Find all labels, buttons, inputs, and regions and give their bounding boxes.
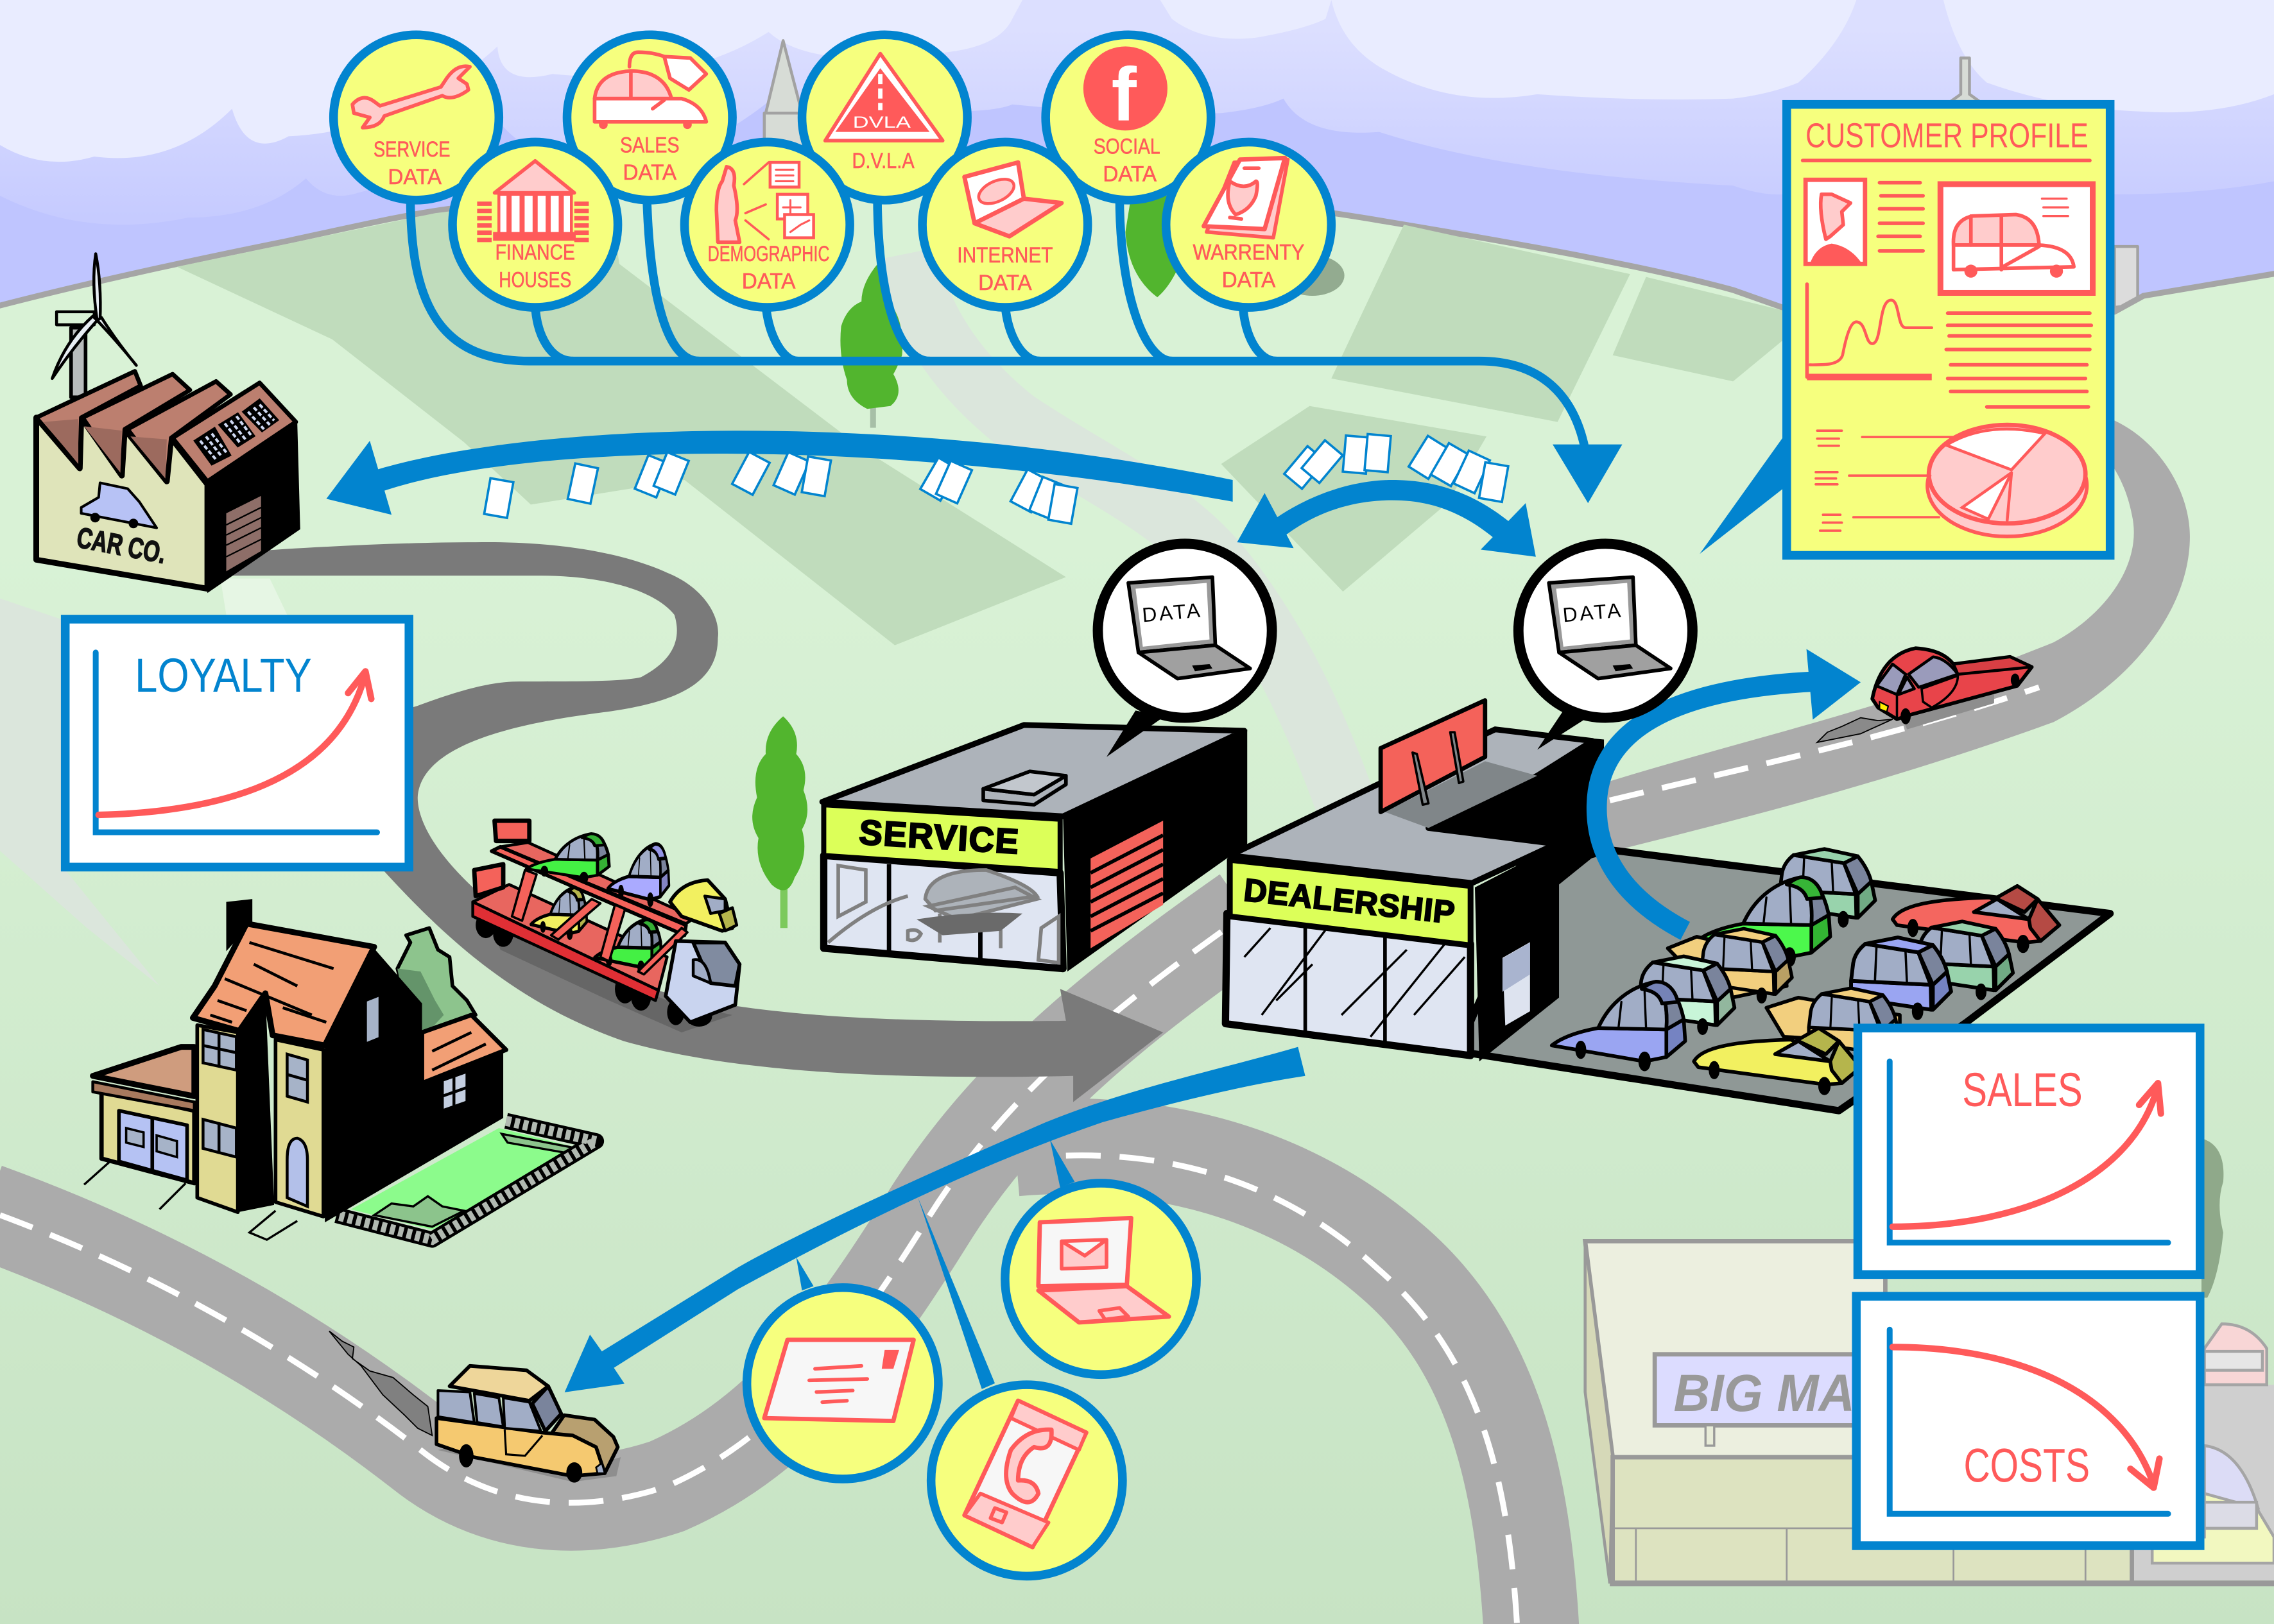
service roof box: [983, 771, 1066, 805]
icon: laptop with pie: [965, 162, 1062, 236]
icon: social f: f: [1112, 53, 1137, 137]
big market store, faded: BIG MA: [1674, 1364, 1855, 1423]
icon: person with charts: [716, 162, 814, 242]
circle: laptop email: [1005, 1183, 1196, 1374]
garden: [336, 1121, 596, 1240]
tree: beside service: [752, 716, 807, 928]
loyalty chart: [65, 619, 409, 867]
icon: social f: [1083, 46, 1167, 137]
light roads with dashed centre lines: [0, 914, 1531, 1624]
blue arrow back to factory: [326, 431, 1233, 515]
data collection lines: [410, 196, 1585, 450]
arrow head into dealership data: [1553, 445, 1623, 503]
parking lot: [1458, 850, 2110, 1111]
circle: demographic data: [685, 142, 850, 307]
road dashes: [0, 687, 2039, 1624]
sales rising curve: [1893, 1083, 2161, 1227]
costs falling curve: [1893, 1347, 2159, 1488]
circle: sales data: SALES: [620, 133, 680, 157]
icon: dvla road sign: DVLA: [853, 114, 911, 132]
distant castle: [1051, 58, 2138, 312]
laptop: service: DATA: [1141, 599, 1202, 626]
icon: dvla road sign: [825, 54, 943, 141]
big market store, faded: [1585, 1241, 2274, 1584]
cars in lot: [1552, 849, 2060, 1093]
roofs: [193, 924, 374, 1045]
circle: service data: DATA: [388, 165, 442, 189]
sales chart: [1858, 1028, 2200, 1274]
circle: post: [747, 1288, 938, 1479]
tree: behind warranty circle: [1125, 196, 1186, 297]
pale tracks: [0, 253, 1348, 986]
profile title: CUSTOMER PROFILE: [1805, 116, 2089, 155]
portrait lines: [1878, 183, 1923, 251]
portrait: [1805, 180, 1865, 264]
profile text lines: [1946, 313, 2091, 407]
blue arrow from lot to road: [1597, 649, 1861, 931]
circle: internet data: INTERNET: [957, 243, 1053, 268]
laptop: service: [1128, 577, 1250, 679]
icon: bank with coins: [485, 161, 581, 242]
circle: phone: [931, 1385, 1123, 1576]
circle: social data: [1046, 35, 1211, 200]
roof sign: [1381, 700, 1485, 812]
background: sky and clouds: [0, 0, 2274, 464]
circle: demographic data: DATA: [742, 269, 796, 294]
blue double arrow between laptops: [1237, 480, 1536, 557]
data bubble: dealership: [1519, 543, 1693, 749]
circle: finance houses: [452, 142, 618, 307]
tree: behind data line: [840, 262, 902, 428]
circle: social data: SOCIAL: [1094, 135, 1160, 159]
pie legend lines: [1816, 431, 1955, 531]
circle: service data: [334, 35, 499, 200]
icon: wrench: [352, 66, 470, 128]
circle: warranty data: DATA: [1222, 268, 1276, 292]
customer car bottom left: [329, 1331, 621, 1483]
dealership sign band: [1230, 860, 1470, 945]
costs chart: [1856, 1296, 2200, 1546]
customer profile pointer: [1700, 432, 1787, 554]
house windows: [203, 995, 467, 1206]
icon: warranty booklet: [1203, 158, 1288, 238]
data bubble: service: [1098, 543, 1272, 757]
laptop: dealership: DATA: [1562, 599, 1622, 626]
dark road arrow from factory to dealership: [218, 542, 1163, 1102]
road to the right: [1581, 420, 2190, 855]
profile line graph: [1807, 284, 1932, 377]
factory: car co: [36, 253, 300, 593]
loyalty axes: [96, 653, 377, 832]
service sign band: [823, 805, 1060, 871]
dealership building: [1225, 700, 1604, 1061]
circle: finance houses: FINANCE: [495, 241, 575, 265]
data cards moving: [484, 434, 1508, 524]
main house walls: [197, 1025, 238, 1212]
circle: warranty data: WARRENTY: [1193, 241, 1304, 265]
blue arrow to customer car: [565, 1047, 1305, 1392]
costs axes: [1890, 1329, 2168, 1514]
service building: [822, 725, 1247, 971]
circle: finance houses: HOUSES: [499, 268, 571, 292]
main house black body: [325, 947, 503, 1222]
panel: customer profile: [1787, 105, 2110, 556]
service sign text: SERVICE: [858, 813, 1020, 861]
circle: internet data: DATA: [978, 271, 1032, 295]
car picture: [1940, 184, 2093, 293]
house: [84, 899, 596, 1240]
circle: sales data: DATA: [623, 160, 676, 185]
red car on road: [1817, 648, 2032, 742]
costs title: COSTS: [1963, 1439, 2090, 1492]
circle: social data: DATA: [1103, 162, 1157, 186]
sales title: SALES: [1962, 1063, 2083, 1116]
circle: internet data: [922, 142, 1088, 307]
car transporter truck: [473, 821, 739, 1032]
circle: service data: SERVICE: [374, 137, 451, 162]
pie chart: [1927, 425, 2087, 536]
field patches: [177, 191, 1782, 645]
distant church spire: [657, 40, 812, 261]
circle: warranty data: [1166, 142, 1331, 307]
factory: car co: CAR CO.: [74, 521, 169, 570]
loyalty rising curve: [99, 671, 371, 815]
garage: [101, 1090, 194, 1183]
contact pointers: [797, 1140, 1074, 1389]
icon: car with price tag: [594, 52, 706, 129]
circle: sales data: [567, 35, 732, 200]
circle: demographic data: DEMOGRAPHIC: [708, 242, 829, 266]
faded traffic at right edge: [2152, 1138, 2274, 1563]
laptop: dealership: [1549, 577, 1671, 679]
sales axes: [1890, 1061, 2168, 1243]
circle: dvla: D.V.L.A: [852, 149, 915, 173]
loyalty title: LOYALTY: [135, 649, 312, 702]
circle: dvla: [802, 35, 967, 200]
dealership sign text: DEALERSHIP: [1242, 872, 1456, 930]
